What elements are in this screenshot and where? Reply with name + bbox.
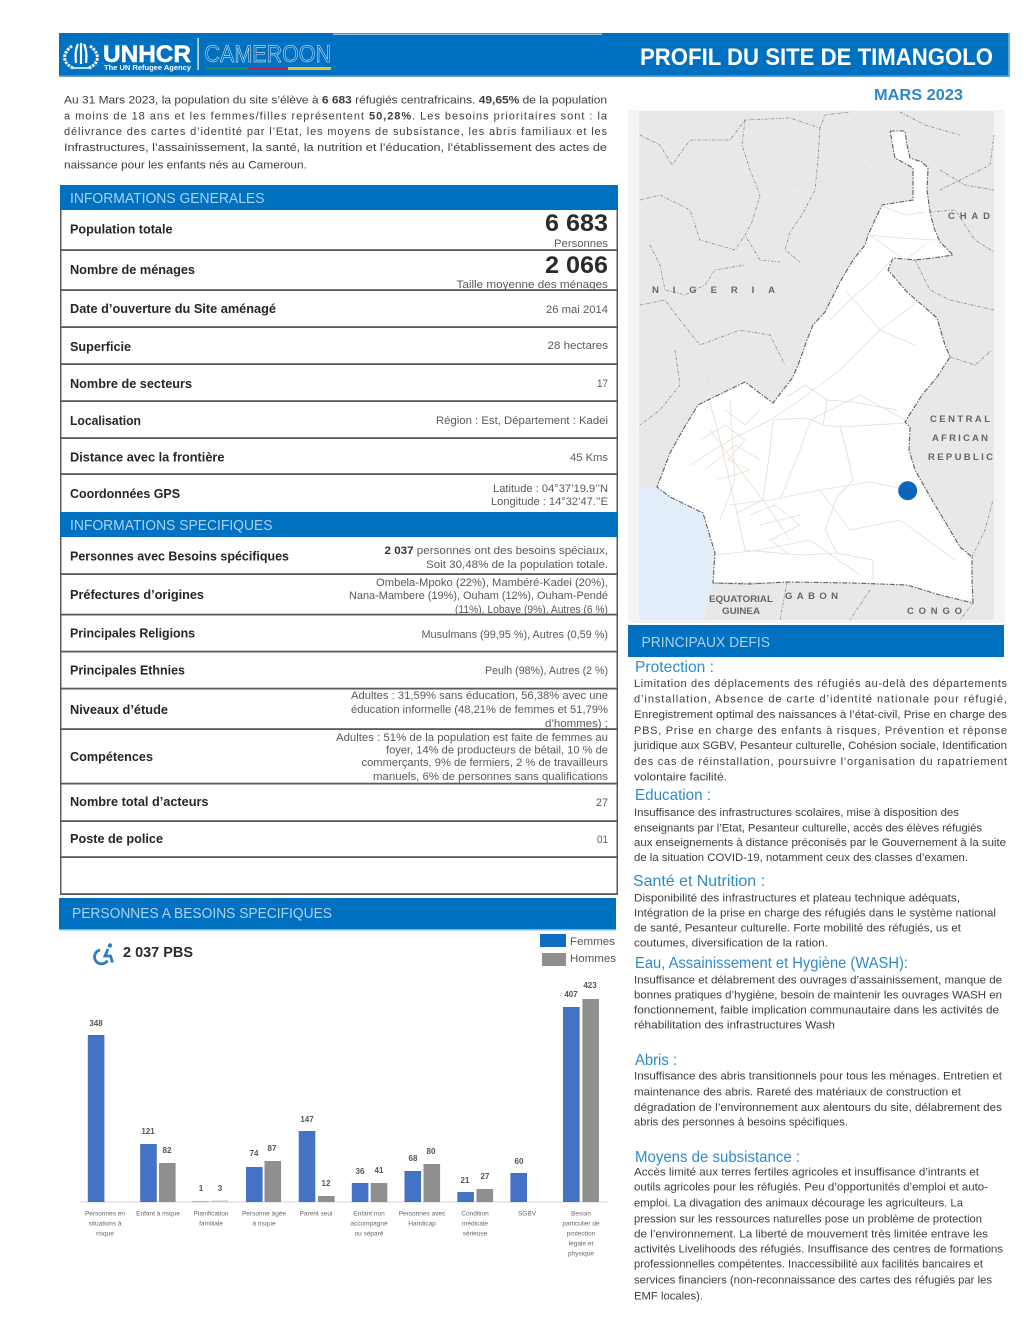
bar values: 1 — [199, 1184, 204, 1193]
section: moyens de subsistance: professionnelles compétentes. Inaccessibilité aux facilités bancaires et — [634, 1258, 983, 1270]
row: nombre de menages: Taille moyenne des ménages — [456, 279, 609, 291]
bar values — [89, 981, 597, 1193]
bar categories: SGBV — [518, 1210, 537, 1218]
bar categories: physique — [568, 1250, 594, 1258]
country labels: CONGO — [907, 606, 962, 617]
section: moyens de subsistance: emploi. La divagation des animaux décourage les agriculteurs. La — [634, 1198, 964, 1210]
row: niveaux d'etude: Adultes : 31,59% sans éducation, 56,38% avec une — [351, 690, 608, 702]
bar values: 74 — [250, 1149, 259, 1158]
section: education: Insuffisance des infrastructures scolaires, mise à disposition des — [634, 807, 960, 819]
section: eau assainissement hygiene: Insuffisance et délabrement des ouvrages d’assainissement, manque de — [634, 974, 1002, 986]
section: moyens de subsistance — [634, 1149, 1004, 1302]
intro text block: a moins de 18 ans et les femmes/filles représentent 50,28%. Les besoins prioritaires sont : la — [64, 110, 608, 122]
section: education: aux enseignements à distance préconisés par le Gouvernement à la suite — [634, 837, 1006, 849]
heading: informations specifiques: INFORMATIONS SPECIFIQUES — [70, 517, 272, 534]
heading: principaux defis — [628, 625, 1004, 657]
bar categories: Handicap — [408, 1220, 436, 1228]
bar categories: légale et — [569, 1240, 593, 1248]
section: eau assainissement hygiene: Eau, Assainissement et Hygiène (WASH): — [635, 955, 908, 972]
section: abris: Insuffisance des abris transitionnels pour tous les ménages. Entretien et — [634, 1070, 1002, 1082]
row: niveaux d'etude: Niveaux d’étude — [70, 703, 168, 717]
row: niveaux d'etude: d’hommes) ; — [545, 718, 608, 730]
section: abris: maintenance des abris. Rareté des matériaux de construction et — [634, 1086, 961, 1098]
row: competences: commerçants, 9% de fermiers, 2 % de travailleurs — [362, 757, 609, 769]
row: nombre total d'acteurs: Nombre total d’acteurs — [70, 795, 209, 809]
country labels: EQUATORIAL — [709, 594, 773, 605]
row: population totale: Population totale — [70, 222, 173, 236]
row: prefectures d'origines: Ombela-Mpoko (22%), Mambéré-Kadei (20%), — [376, 577, 608, 589]
row: competences — [70, 732, 609, 783]
row: date d'ouverture — [70, 302, 608, 316]
row: personnes avec besoins specifiques: 2 037 personnes ont des besoins spéciaux, — [384, 545, 608, 557]
intro text block — [64, 94, 608, 172]
section: protection: d’installation, Absence de carte d’identité nationale pour réfugié, — [634, 694, 1007, 706]
row: coordonnees gps: Coordonnées GPS — [70, 487, 180, 501]
row: niveaux d'etude: éducation informelle (48,21% de femmes et 51,79% — [351, 704, 608, 716]
section: moyens de subsistance: Moyens de subsistance : — [635, 1149, 800, 1166]
row: superficie — [70, 340, 609, 354]
bar values: 121 — [141, 1127, 155, 1136]
section: protection: des cas de réinstallation, poursuivre l’organisation du rapatriement — [634, 756, 1007, 768]
bar values: 41 — [375, 1166, 384, 1175]
row: prefectures d'origines: Préfectures d’origines — [70, 588, 204, 602]
row: principales religions: Musulmans (99,95 %), Autres (0,59 %) — [422, 629, 608, 641]
bar values: 68 — [409, 1154, 418, 1163]
section: abris: abris des personnes à besoins spécifiques. — [634, 1116, 848, 1128]
section: moyens de subsistance: pression sur les ressources naturelles pose un problème de protection — [634, 1214, 982, 1226]
intro text block: Au 31 Mars 2023, la population du site s’élève à 6 683 réfugiés centrafricains. 49,65% de la population — [64, 94, 607, 106]
section: abris — [634, 1052, 1003, 1128]
country labels: CENTRAL — [930, 414, 990, 425]
row: coordonnees gps: Longitude : 14°32’47.’’E — [491, 496, 608, 508]
row: personnes avec besoins specifiques: Personnes avec Besoins spécifiques — [70, 550, 289, 564]
icon: wheelchair — [95, 943, 112, 964]
panel: informations generales — [60, 185, 618, 512]
country labels: AFRICAN — [932, 433, 988, 444]
row: superficie: Superficie — [70, 340, 131, 354]
bar categories: situations à — [89, 1220, 122, 1228]
bar values: 21 — [461, 1176, 470, 1185]
map of Cameroon — [628, 110, 1005, 623]
bar values: 407 — [564, 990, 578, 999]
row: personnes avec besoins specifiques — [70, 545, 608, 571]
row: niveaux d'etude — [70, 690, 608, 730]
section: abris: Abris : — [635, 1052, 677, 1069]
row: date d'ouverture: Date d’ouverture du Site aménagé — [70, 302, 276, 316]
row: superficie: 28 hectares — [548, 340, 609, 352]
header banner — [59, 33, 1010, 77]
bar values: 60 — [515, 1157, 524, 1166]
row: prefectures d'origines: Nana-Mambere (19%), Ouham (12%), Ouham-Pendé — [349, 590, 608, 602]
row: nombre de secteurs: Nombre de secteurs — [70, 377, 192, 391]
row: coordonnees gps — [70, 483, 608, 508]
row: nombre de secteurs: 17 — [597, 378, 608, 390]
section: sante et nutrition: Disponibilité des infrastructures et plateau technique adéquats, — [634, 892, 960, 904]
bar categories: protection — [567, 1230, 596, 1238]
row: localisation: Région : Est, Département : Kadei — [436, 415, 608, 427]
section: eau assainissement hygiene — [634, 955, 1002, 1032]
row: competences: Adultes : 51% de la population est faite de femmes au — [336, 732, 608, 744]
row: principales ethnies: Principales Ethnies — [70, 664, 185, 678]
section: eau assainissement hygiene: bonnes pratiques d’hygiène, besoin de maintenir les ouvrages WASH en — [634, 990, 1002, 1002]
section: protection: PBS, Prise en charge des enfants à risques, Prévention et réponse — [634, 725, 1007, 737]
row: poste de police: Poste de police — [70, 832, 163, 846]
bar categories: Planification — [193, 1210, 229, 1218]
UNHCR logo: The UN Refugee Agency — [104, 63, 192, 72]
bar categories: familiale — [199, 1220, 223, 1228]
bar values: 348 — [89, 1019, 103, 1028]
row: coordonnees gps: Latitude : 04°37’19.9’’N — [493, 483, 608, 495]
bar categories — [85, 1210, 600, 1258]
bar values: 80 — [427, 1147, 436, 1156]
row: nombre de menages — [70, 252, 609, 291]
row: competences: foyer, 14% de producteurs de bétail, 10 % de — [386, 744, 608, 756]
section: sante et nutrition: de santé, Pesanteur culturelle. Forte mobilité des réfugiés, us et — [634, 922, 961, 934]
section: protection — [633, 659, 1008, 784]
section: moyens de subsistance: EMF locales). — [634, 1290, 703, 1302]
bar chart — [80, 981, 608, 1258]
bar values: 147 — [300, 1115, 314, 1124]
row: personnes avec besoins specifiques: Soit 30,48% de la population totale. — [426, 559, 608, 571]
bar categories: Enfant à risque — [136, 1210, 180, 1218]
bar values: 423 — [583, 981, 597, 990]
title: PROFIL DU SITE DE TIMANGOLO — [640, 44, 993, 71]
bar values: 87 — [268, 1144, 277, 1153]
row: population totale: 6 683 — [545, 210, 608, 237]
bar categories: risque — [96, 1230, 114, 1238]
bar categories: accompagné — [350, 1220, 388, 1228]
country labels: GABON — [785, 591, 838, 602]
section: protection: Limitation des déplacements des réfugiés au-delà des départements — [634, 678, 1008, 690]
row: principales religions: Principales Religions — [70, 626, 195, 640]
row: nombre total d'acteurs: 27 — [596, 797, 608, 809]
table frame general — [60, 210, 618, 512]
date label: MARS 2023 — [874, 87, 963, 104]
row: nombre total d'acteurs — [70, 795, 608, 809]
row: competences: manuels, 6% de personnes sans qualifications — [373, 771, 609, 783]
row: distance — [70, 450, 609, 464]
row: principales ethnies: Peulh (98%), Autres (2 %) — [485, 665, 608, 677]
bar categories: Besoin — [571, 1210, 591, 1218]
bar categories: Condition — [461, 1210, 489, 1218]
country labels: NIGERIA — [652, 285, 775, 296]
section: moyens de subsistance: Accès limité aux terres fertiles agricoles et insuffisance d’intrants et — [634, 1166, 979, 1178]
section: protection: volontaire facilité. — [634, 772, 727, 784]
bar values: 82 — [163, 1146, 172, 1155]
row: principales ethnies — [70, 664, 608, 678]
UNHCR logo: UNHCR — [103, 41, 191, 68]
section: sante et nutrition: Intégration de la prise en charge des réfugiés dans le système national — [634, 908, 996, 920]
bar categories: Parent seul — [300, 1210, 333, 1218]
total pbs: 2 037 PBS — [123, 945, 193, 961]
panel: personnes a besoins specifiques — [59, 898, 617, 1258]
neighbouring borders — [640, 112, 994, 620]
section: education: Education : — [635, 787, 711, 804]
ocean — [639, 487, 715, 620]
row: prefectures d'origines — [70, 577, 608, 616]
row: distance: Distance avec la frontière — [70, 450, 225, 464]
panel: informations specifiques — [60, 512, 618, 895]
section: sante et nutrition: Santé et Nutrition : — [633, 873, 765, 890]
roads — [640, 140, 955, 575]
bar values: 3 — [218, 1184, 223, 1193]
intro text block: naissance pour les enfants nés au Cameroun. — [64, 160, 307, 172]
row: poste de police — [70, 832, 608, 846]
section: sante et nutrition — [633, 873, 996, 950]
bar categories: à risque — [252, 1220, 276, 1228]
row: localisation — [70, 414, 608, 428]
panel: principaux defis — [628, 625, 1008, 1302]
heading: principaux defis: PRINCIPAUX DEFIS — [642, 634, 770, 651]
row: nombre de menages: Nombre de ménages — [70, 263, 195, 277]
bar categories: Personnes en — [85, 1210, 125, 1218]
row: competences: Compétences — [70, 750, 153, 764]
row: nombre de secteurs — [70, 377, 608, 391]
bar categories: Personne âgée — [242, 1210, 286, 1218]
row: prefectures d'origines: (11%), Lobaye (9%), Autres (6 %) — [455, 604, 608, 616]
heading: personnes a besoins specifiques — [59, 898, 616, 930]
bar categories: ou séparé — [355, 1230, 384, 1238]
bar values: 12 — [322, 1179, 331, 1188]
section: sante et nutrition: coutumes, diversification de la ration. — [634, 938, 828, 950]
country labels: GUINEA — [722, 606, 760, 617]
heading: informations generales: INFORMATIONS GENERALES — [70, 190, 264, 207]
section: education: de la situation COVID-19, notamment ceux des classes d’examen. — [634, 852, 968, 864]
heading: informations specifiques — [60, 512, 618, 537]
UNHCR logo — [65, 38, 331, 72]
regional boundaries — [710, 205, 935, 580]
section: abris: dégradation de l’environnement aux alentours du site, délabrement des — [634, 1102, 1003, 1114]
intro text block: délivrance des cartes d’identité par l’Etat, les moyens de subsistance, les abris familiaux et les — [64, 126, 608, 138]
legend — [540, 934, 617, 966]
country labels: CHAD — [948, 211, 990, 222]
heading: informations generales — [60, 185, 618, 210]
bar categories: Enfant non — [353, 1210, 385, 1218]
section: education — [634, 787, 1006, 864]
row: population totale — [70, 210, 609, 250]
bar categories: médicale — [462, 1220, 488, 1228]
cameroon territory — [657, 131, 973, 603]
icon: UN emblem — [65, 43, 97, 68]
site marker: Timangolo — [898, 481, 917, 500]
legend: Hommes — [570, 953, 617, 965]
row: date d'ouverture: 26 mai 2014 — [546, 304, 608, 316]
UNHCR logo: CAMEROON — [204, 41, 331, 68]
bar categories: sérieuse — [463, 1230, 488, 1238]
section: moyens de subsistance: activités Livelihoods des réfugiés. Insuffisance des centres de formations — [634, 1244, 1004, 1256]
bar categories: Personnes avec — [399, 1210, 446, 1218]
section: moyens de subsistance: outils agricoles pour les réfugiés. Peu d’opportunités d’emploi et auto- — [634, 1182, 988, 1194]
bar categories: particulier de — [562, 1220, 600, 1228]
bar values: 36 — [356, 1167, 365, 1176]
country labels — [652, 211, 993, 617]
heading: personnes a besoins specifiques: PERSONNES A BESOINS SPECIFIQUES — [72, 905, 332, 922]
legend: Femmes — [570, 936, 616, 948]
section: protection: Protection : — [635, 659, 714, 676]
intro text block: Infrastructures, l’assainissement, la santé, la nutrition et l’éducation, l’établissement des actes de — [64, 142, 607, 154]
section: moyens de subsistance: services financiers (non-reconnaissance des cartes des réfugiés par les — [634, 1274, 993, 1286]
section: eau assainissement hygiene: fonctionnement, faible implication communautaire dans les activités de — [634, 1004, 999, 1016]
row: localisation: Localisation — [70, 414, 141, 428]
section: protection: juridique aux SGBV, Pesanteur culturelle, Cohésion sociale, Identification — [633, 740, 1007, 752]
section: eau assainissement hygiene: réhabilitation des infrastructures Wash — [634, 1020, 835, 1032]
row: distance: 45 Kms — [570, 452, 609, 464]
section: moyens de subsistance: de l’environnement. La liberté de mouvement très limitée entrave les — [634, 1228, 989, 1240]
section: education: enseignants par l’Etat, Pesanteur culturelle, accès des élèves réfugiés — [634, 822, 983, 834]
table frame specific — [60, 537, 618, 895]
country labels: REPUBLIC — [928, 452, 993, 463]
row: poste de police: 01 — [597, 834, 608, 846]
section: protection: Enregistrement optimal des naissances à l’état-civil, Prise en charge des — [634, 709, 1008, 721]
row: population totale: Personnes — [554, 238, 609, 250]
row: nombre de menages: 2 066 — [545, 252, 608, 279]
row: principales religions — [70, 626, 608, 641]
bar values: 27 — [481, 1172, 490, 1181]
